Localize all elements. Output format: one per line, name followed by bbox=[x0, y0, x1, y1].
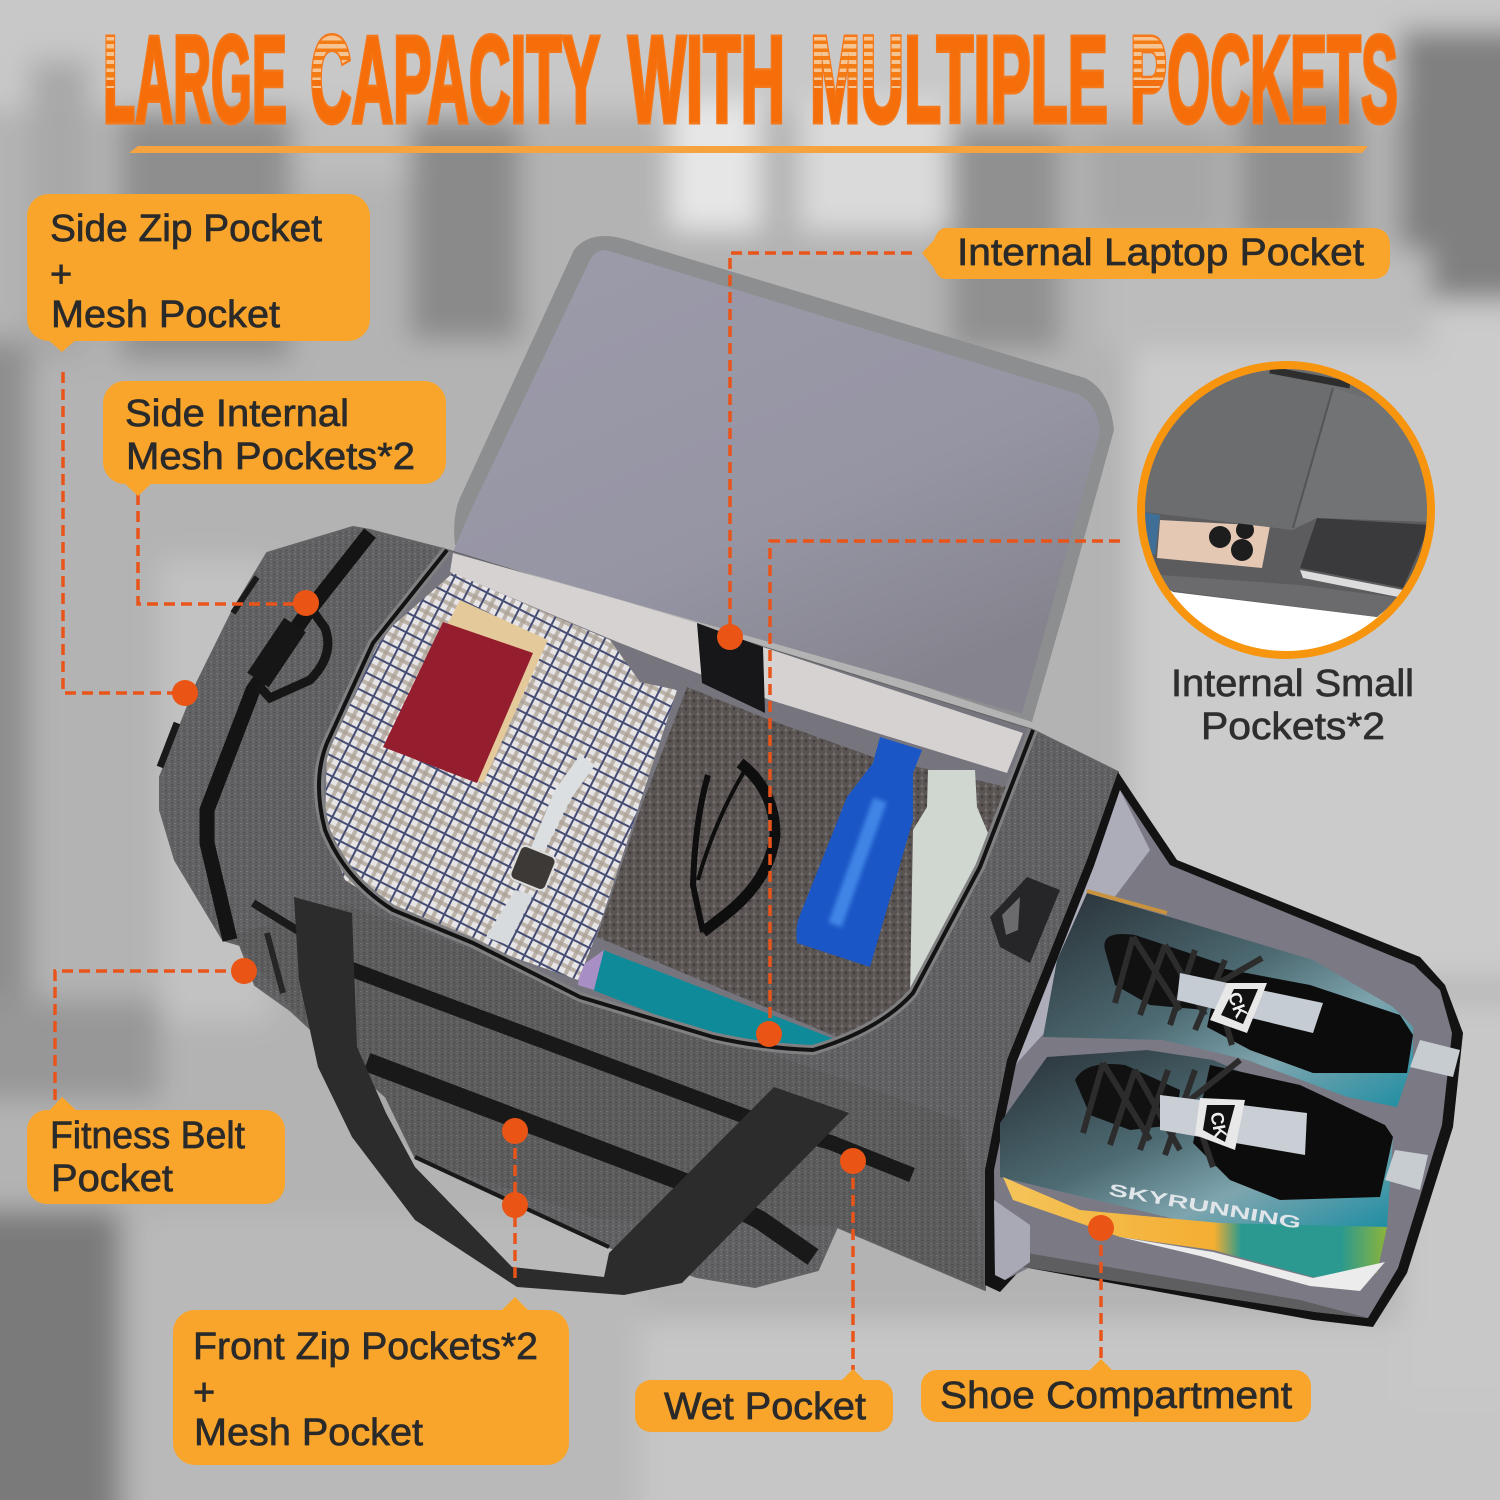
callout photo: internal small pockets bbox=[1130, 355, 1440, 655]
title: LARGE bbox=[103, 12, 287, 149]
sunglasses bbox=[693, 763, 775, 932]
sole bbox=[1003, 1177, 1387, 1277]
leader lines bbox=[55, 253, 1120, 1370]
label: front zip pockets + mesh pocket: Mesh Pocket bbox=[194, 1412, 423, 1454]
label: shoe compartment: Shoe Compartment bbox=[940, 1375, 1292, 1417]
label: wet pocket: Wet Pocket bbox=[664, 1386, 866, 1428]
lavender side lining bbox=[1016, 790, 1150, 1064]
shoe compartment bbox=[985, 772, 1463, 1327]
label: front zip pockets + mesh pocket bbox=[173, 1297, 569, 1465]
label: wet pocket bbox=[635, 1369, 893, 1432]
title underline bbox=[129, 146, 1368, 153]
compartment opening bbox=[319, 550, 1033, 1050]
label: side internal mesh pockets bbox=[103, 381, 446, 496]
blue bottle bbox=[796, 737, 922, 967]
title: MULTIPLE bbox=[810, 12, 1108, 149]
shirt bbox=[325, 573, 677, 980]
label: internal laptop pocket bbox=[922, 228, 1390, 279]
white bottle bbox=[910, 770, 988, 993]
buckle bbox=[990, 877, 1060, 963]
title: CAPACITY bbox=[310, 12, 600, 149]
label: front zip pockets + mesh pocket: Front Zip Pockets*2 bbox=[193, 1326, 538, 1368]
lower shoe bbox=[1000, 1050, 1428, 1291]
upper shoe: CK bbox=[1224, 989, 1252, 1021]
main body bbox=[160, 527, 1118, 1290]
phone bbox=[1157, 520, 1270, 568]
label: fitness belt pocket: Pocket bbox=[51, 1158, 173, 1200]
label: internal laptop pocket: Internal Laptop Pocket bbox=[957, 232, 1364, 274]
label: fitness belt pocket: Fitness Belt bbox=[50, 1115, 245, 1157]
text: internal small pockets bbox=[1171, 663, 1414, 748]
flap bbox=[1145, 369, 1426, 530]
carry handle bbox=[294, 897, 849, 1295]
label: side zip pocket + mesh pocket bbox=[27, 194, 370, 352]
label: side zip pocket + mesh pocket: + bbox=[50, 254, 72, 296]
label: fitness belt pocket bbox=[27, 1097, 285, 1204]
lower body shading bbox=[230, 905, 985, 1290]
leader dots bbox=[172, 590, 1114, 1241]
watch bbox=[486, 755, 595, 945]
teal folder bbox=[593, 950, 837, 1050]
label: side internal mesh pockets: Mesh Pockets*2 bbox=[126, 436, 415, 478]
towel bbox=[597, 687, 1007, 1037]
title: WITH bbox=[628, 12, 785, 149]
zipper outline with piping bbox=[319, 550, 1033, 1050]
label: side zip pocket + mesh pocket: Side Zip Pocket bbox=[50, 208, 322, 250]
laces bbox=[1083, 1060, 1240, 1167]
laptop bbox=[450, 553, 1023, 773]
text: internal small pockets: Pockets*2 bbox=[1201, 706, 1385, 748]
lower shoe: SKYRUNNING bbox=[1107, 1180, 1303, 1233]
label: side internal mesh pockets: Side Internal bbox=[125, 393, 349, 435]
upper shoe bbox=[1043, 891, 1460, 1107]
title bbox=[103, 12, 1398, 149]
passport with cards bbox=[383, 600, 548, 783]
bag lid with laptop pocket lining bbox=[453, 236, 1114, 722]
lid strap bbox=[697, 623, 765, 713]
pocket base bbox=[1145, 512, 1426, 617]
front zip lines bbox=[348, 968, 912, 1257]
label: shoe compartment bbox=[921, 1359, 1311, 1422]
laces bbox=[1115, 937, 1262, 1045]
text: internal small pockets: Internal Small bbox=[1171, 663, 1414, 705]
lower shoe: CK bbox=[1206, 1110, 1231, 1139]
side zipper with D ring bbox=[160, 533, 370, 993]
label: side zip pocket + mesh pocket: Mesh Pocket bbox=[51, 294, 280, 336]
label: front zip pockets + mesh pocket: + bbox=[193, 1372, 215, 1414]
tablet bbox=[1300, 518, 1430, 588]
duffel bag bbox=[160, 236, 1463, 1327]
